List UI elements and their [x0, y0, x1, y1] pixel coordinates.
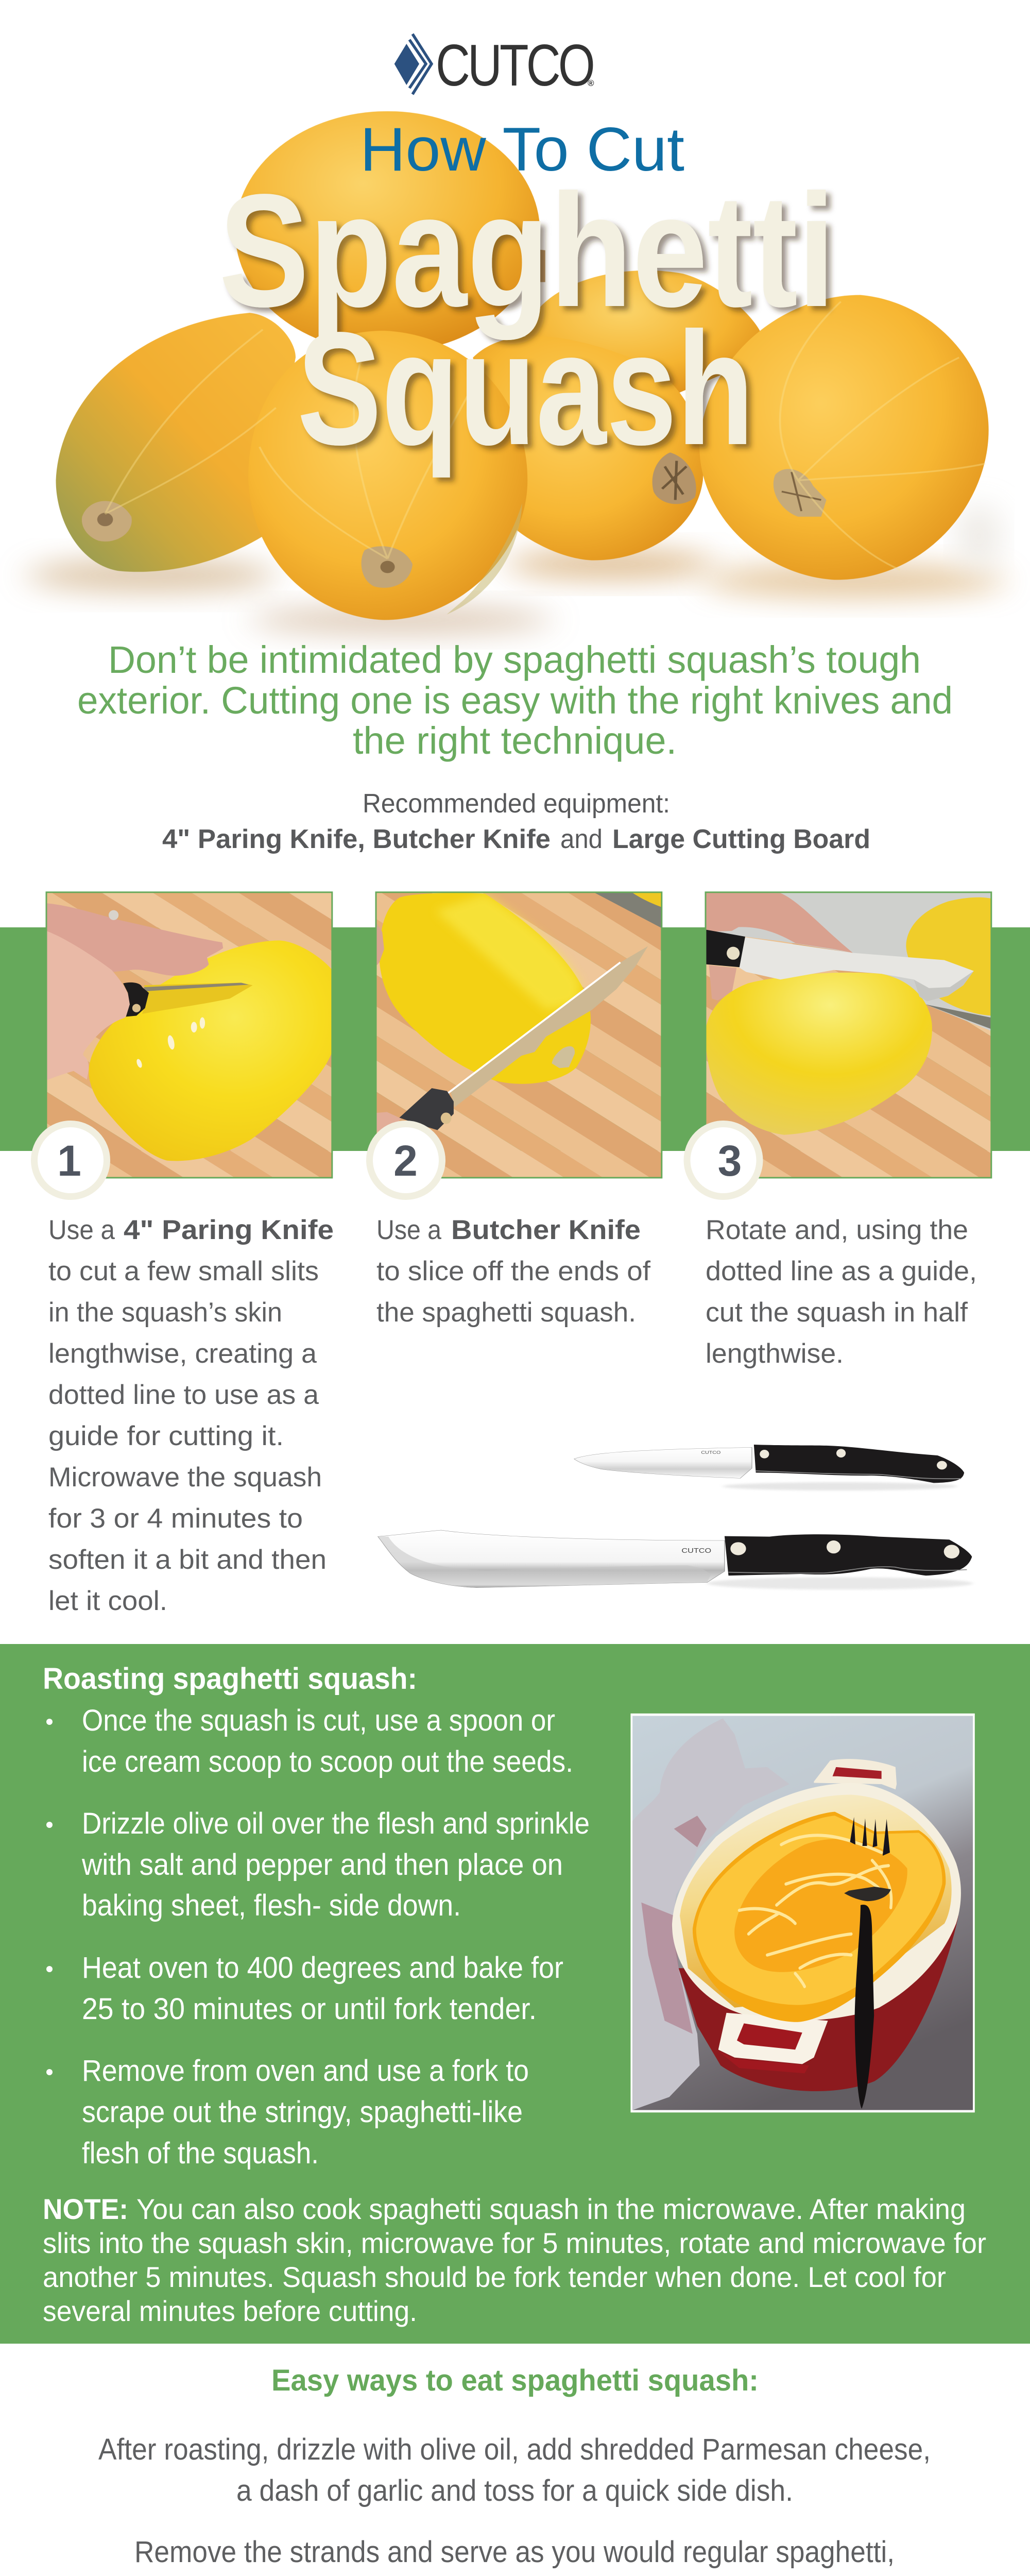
serving ideas — [98, 2433, 931, 2576]
step 2 text: Use a — [376, 1215, 441, 1245]
note: several minutes before cutting. — [43, 2295, 417, 2327]
step 1 text: Use a — [48, 1215, 115, 1245]
green band behind step photos — [0, 927, 1030, 1151]
squash: middle with stem — [473, 336, 703, 561]
intro text: the right technique. — [353, 719, 677, 762]
recommended equipment: 4" Paring Knife, Butcher Knife — [162, 824, 551, 854]
photo: step 3 cutting squash in half — [706, 892, 991, 1178]
step number badge 1 — [34, 1124, 107, 1196]
title: How To Cut: How To Cut — [360, 115, 684, 184]
note: NOTE: — [43, 2193, 128, 2225]
bullet list: Drizzle olive oil over the flesh and sprinkle — [82, 1807, 590, 1840]
squash: top — [235, 111, 545, 352]
recommended equipment — [162, 789, 870, 854]
bullet list: with salt and pepper and then place on — [81, 1848, 563, 1882]
serving ideas: a dash of garlic and toss for a quick side dish. — [236, 2474, 793, 2507]
heading: easy ways to eat: Easy ways to eat spaghetti squash: — [271, 2364, 759, 2397]
step 3 text: dotted line as a guide, — [706, 1256, 977, 1286]
step 1 text: guide for cutting it. — [48, 1421, 284, 1451]
step 1 text: 4" Paring Knife — [124, 1215, 334, 1245]
step number badge 1: 1 — [57, 1137, 81, 1185]
photo: step 1 paring knife slitting squash — [46, 892, 332, 1178]
squash: front centre — [248, 331, 527, 620]
hero photo: pile of spaghetti squash — [26, 111, 1005, 633]
heading: roasting: Roasting spaghetti squash: — [43, 1662, 417, 1696]
logo: Cutco — [394, 33, 594, 98]
squash: right — [699, 295, 989, 580]
serving ideas: After roasting, drizzle with olive oil, add shredded Parmesan cheese, — [98, 2433, 931, 2466]
step 2 text — [376, 1215, 650, 1328]
bullet list: Remove from oven and use a fork to — [82, 2054, 529, 2088]
step 1 text: let it cool. — [48, 1586, 167, 1616]
photo: step 2 butcher knife slicing the end — [376, 892, 662, 1178]
bullet list: Once the squash is cut, use a spoon or — [82, 1704, 555, 1737]
step 1 text: to cut a few small slits — [48, 1256, 319, 1286]
bullet list: baking sheet, flesh- side down. — [82, 1889, 461, 1922]
logo wordmark: CUTCO — [436, 33, 593, 98]
icon: paring knife — [574, 1445, 964, 1490]
step 3 text — [706, 1215, 977, 1369]
serving ideas: Remove the strands and serve as you would regular spaghetti, — [134, 2535, 895, 2569]
title: Spaghetti Squash — [219, 161, 835, 479]
step number badge 2: 2 — [393, 1137, 418, 1185]
bullet list: flesh of the squash. — [82, 2137, 319, 2170]
squash: left with green end — [56, 313, 296, 572]
icon: butcher knife: CUTCO — [681, 1547, 711, 1554]
note: slits into the squash skin, microwave for 5 minutes, rotate and microwave for — [43, 2227, 986, 2259]
logo: Cutco: ® — [588, 78, 594, 88]
recommended equipment: Recommended equipment: — [363, 789, 670, 819]
bullet list: scrape out the stringy, spaghetti-like — [82, 2095, 523, 2129]
step 1 text: lengthwise, creating a — [48, 1338, 317, 1369]
panel: roasting instructions — [0, 1644, 1030, 2344]
step 3 text: Rotate and, using the — [706, 1215, 968, 1245]
note: another 5 minutes. Squash should be fork tender when done. Let cool for — [43, 2261, 946, 2293]
recommended equipment: Large Cutting Board — [612, 824, 870, 854]
logo mark: diamond — [394, 34, 432, 94]
step 1 text: for 3 or 4 minutes to — [48, 1503, 303, 1534]
step 1 text: dotted line to use as a — [48, 1380, 319, 1410]
step 1 text: in the squash’s skin — [48, 1297, 282, 1328]
squash: back right — [525, 270, 762, 402]
icon: paring knife: CUTCO — [701, 1450, 720, 1455]
icon: butcher knife — [378, 1530, 973, 1589]
step 1 text: Microwave the squash — [48, 1462, 322, 1493]
recommended equipment: and — [560, 824, 603, 854]
note: You can also cook spaghetti squash in the microwave. After making — [136, 2193, 966, 2225]
title: Spaghetti Squash: Spaghetti — [219, 161, 835, 341]
bullet list — [46, 1704, 590, 2170]
step number badge 3 — [687, 1124, 760, 1196]
step number badge 3: 3 — [718, 1137, 742, 1185]
step 1 text — [48, 1215, 334, 1616]
intro text — [77, 638, 953, 762]
step 2 text: the spaghetti squash. — [376, 1297, 636, 1328]
bullet list: ice cream scoop to scoop out the seeds. — [82, 1745, 573, 1778]
intro text: Don’t be intimidated by spaghetti squash’s tough — [108, 638, 921, 681]
step 3 text: cut the squash in half — [706, 1297, 968, 1328]
step 2 text: to slice off the ends of — [376, 1256, 650, 1286]
intro text: exterior. Cutting one is easy with the right knives and — [77, 679, 953, 722]
knives — [378, 1445, 973, 1589]
bullet list: Heat oven to 400 degrees and bake for — [82, 1951, 563, 1985]
squash cast shadows — [26, 503, 1005, 633]
squash rib highlights — [105, 301, 985, 570]
note — [43, 2193, 986, 2327]
step 3 text: lengthwise. — [706, 1338, 844, 1369]
step number badge 2 — [370, 1124, 442, 1196]
step 1 text: soften it a bit and then — [48, 1545, 327, 1575]
bullet list: 25 to 30 minutes or until fork tender. — [82, 1992, 537, 2026]
step 2 text: Butcher Knife — [451, 1215, 641, 1245]
photo: roasted squash in red dish — [630, 1714, 975, 2112]
title: Spaghetti Squash: Squash — [297, 299, 754, 479]
